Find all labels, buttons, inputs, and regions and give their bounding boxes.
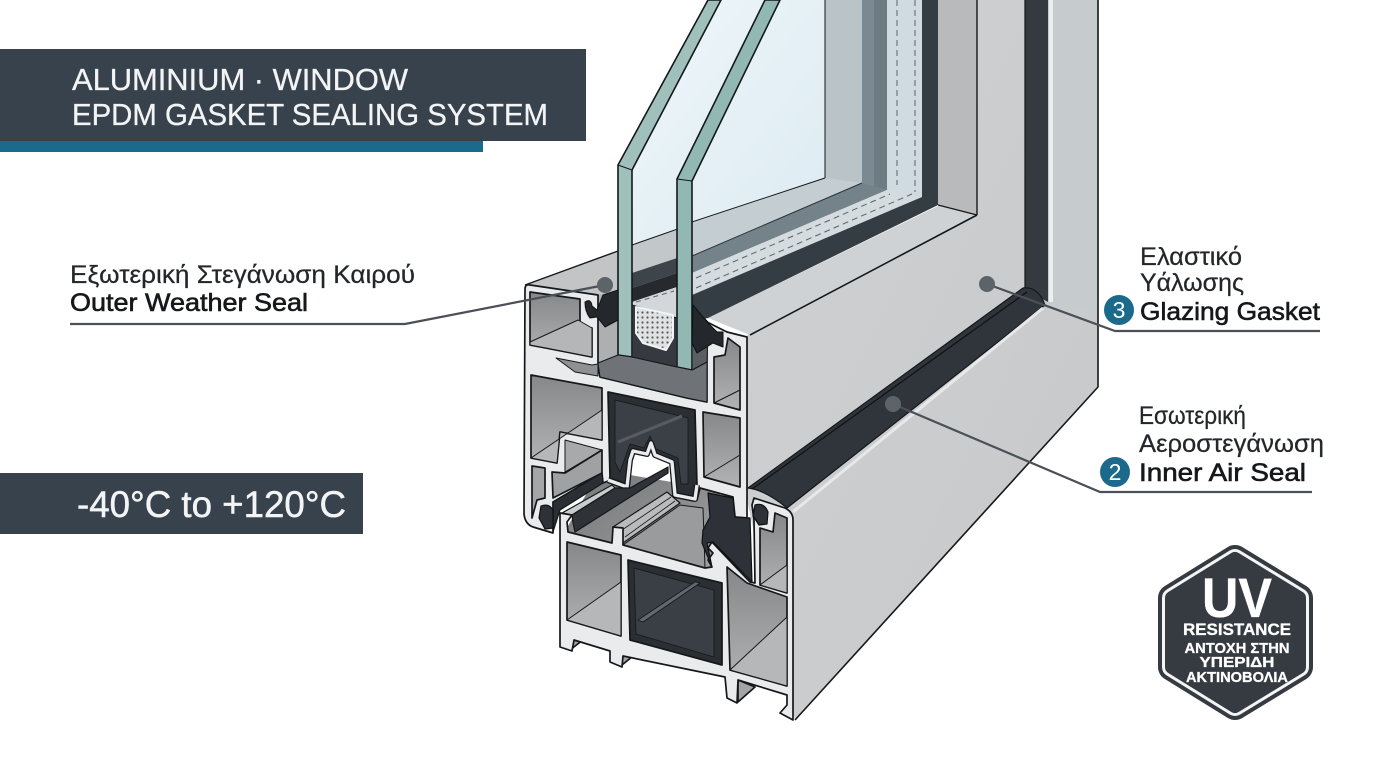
callout: inner air seal: Εσωτερική [1139,402,1246,430]
rear floor plane [623,505,705,568]
sash reveal [938,0,977,215]
top surface left of outer pane [525,251,618,295]
sash top surface [708,205,977,335]
frame outer face [747,0,1098,720]
callout: outer weather seal [70,261,613,324]
lower left chamber [567,542,621,636]
callout: glazing gasket: Ελαστικό [1140,243,1242,271]
upper right small chamber [760,513,787,593]
window frame and sash body [708,0,1098,720]
badge: UV resistance: UV [1202,566,1272,629]
title text [72,62,548,132]
badge: UV resistance: RESISTANCE [1183,620,1291,639]
sash top chamber [530,292,592,357]
main left chamber [531,375,602,463]
reveal floor between panes [632,230,677,273]
steel reinforcement chamber [608,392,697,498]
setting block and sealant [598,305,708,402]
lower left small chambers [532,466,545,518]
callout: inner air seal: Inner Air Seal [1139,459,1306,487]
lower frame aluminium cross-section [560,498,793,720]
hat insert [608,443,697,499]
right upper chamber [714,338,740,410]
badge: UV resistance: ΑΝΤΟΧΗ ΣΤΗΝ [1184,640,1290,657]
temperature range banner: -40°C to +120°C [77,484,346,525]
lower frame tray behind section [560,470,720,575]
callout: glazing gasket: Υάλωσης [1140,269,1244,297]
stepped chamber [565,440,602,472]
foot extrusions [568,628,588,650]
callout: inner air seal: 2 [1109,459,1121,485]
right lower chamber [703,412,740,487]
callout: glazing gasket [979,243,1320,331]
web backing left of outer pane [598,290,618,363]
outer and glazing gasket seals [585,290,723,353]
callout: glazing gasket: Glazing Gasket [1140,298,1320,326]
callout: inner air seal [885,396,1324,492]
reveal floor right of inner pane [692,178,862,256]
inner pane [677,0,780,370]
callout: outer weather seal: Εξωτερική Στεγάνωση Καιρού [70,261,415,289]
outer pane [618,0,721,357]
insulating glass spacer [636,307,673,350]
dark inner air seal band [748,288,1045,512]
lower right chamber [727,567,787,686]
title banner [0,49,586,152]
callout: outer weather seal: Outer Weather Seal [70,289,308,317]
double glazing panes [618,0,780,370]
callout: inner air seal: Αεροστεγάνωση [1139,430,1324,458]
small chamber under sash [556,358,598,376]
temperature range banner [0,473,363,534]
upper sash aluminium cross-section [524,285,747,533]
title text: EPDM GASKET SEALING SYSTEM [72,97,548,132]
glazing reveal behind the glass [525,0,938,363]
vertical frame gasket [1025,0,1048,302]
title text: ALUMINIUM · WINDOW [72,62,409,97]
badge: UV resistance [1172,559,1299,706]
black gasket tongue and end seals [539,493,768,582]
badge: UV resistance: ΑΚΤΙΝΟΒΟΛΙΑ [1186,669,1288,686]
lower frame floor rail and dark seal [553,467,680,543]
lower steel chamber [628,560,722,665]
callout: glazing gasket: 3 [1113,297,1125,323]
badge: UV resistance: ΥΠΕΡΙΔΗ [1200,654,1274,671]
